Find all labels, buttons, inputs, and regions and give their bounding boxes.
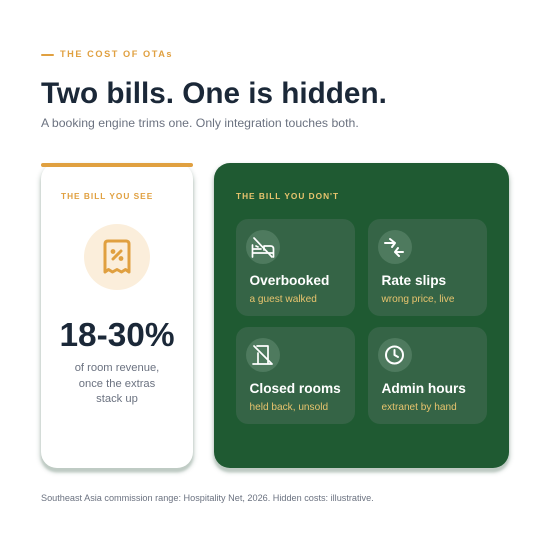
big statistic: 18-30%	[59, 317, 175, 354]
tile: overbooked	[236, 219, 355, 316]
panel: the bill you see	[41, 163, 193, 468]
tile: admin hours	[368, 327, 487, 424]
icon: crossed-out door	[246, 338, 280, 372]
tile subtitle: a guest walked	[250, 294, 317, 304]
tile title: Rate slips	[382, 273, 446, 288]
subtitle: A booking engine trims one. Only integration touches both.	[41, 116, 359, 130]
tile subtitle: extranet by hand	[382, 402, 457, 412]
statistic caption: stack up	[96, 393, 138, 405]
eyebrow: THE COST OF OTAs	[60, 49, 173, 59]
icon: opposing arrows	[378, 230, 412, 264]
footnote: Southeast Asia commission range: Hospitality Net, 2026. Hidden costs: illustrative.	[41, 493, 374, 503]
tile subtitle: wrong price, live	[382, 294, 454, 304]
panel heading: the bill you don't: THE BILL YOU DON'T	[236, 191, 339, 201]
tile title: Admin hours	[382, 381, 466, 396]
top accent bar	[41, 163, 193, 167]
icon: clock	[378, 338, 412, 372]
icon: crossed-out bed	[246, 230, 280, 264]
statistic caption	[75, 362, 159, 405]
statistic caption: once the extras	[79, 378, 155, 390]
tile subtitle: held back, unsold	[250, 402, 328, 412]
statistic caption: of room revenue,	[75, 362, 159, 374]
tile title: Overbooked	[250, 273, 329, 288]
icon: receipt with percent	[84, 224, 150, 290]
tile: closed rooms	[236, 327, 355, 424]
title: Two bills. One is hidden.	[41, 77, 387, 110]
tile title: Closed rooms	[250, 381, 341, 396]
panel: the bill you don't	[214, 163, 509, 468]
tile: rate slips	[368, 219, 487, 316]
panel heading: the bill you see: THE BILL YOU SEE	[61, 191, 153, 201]
